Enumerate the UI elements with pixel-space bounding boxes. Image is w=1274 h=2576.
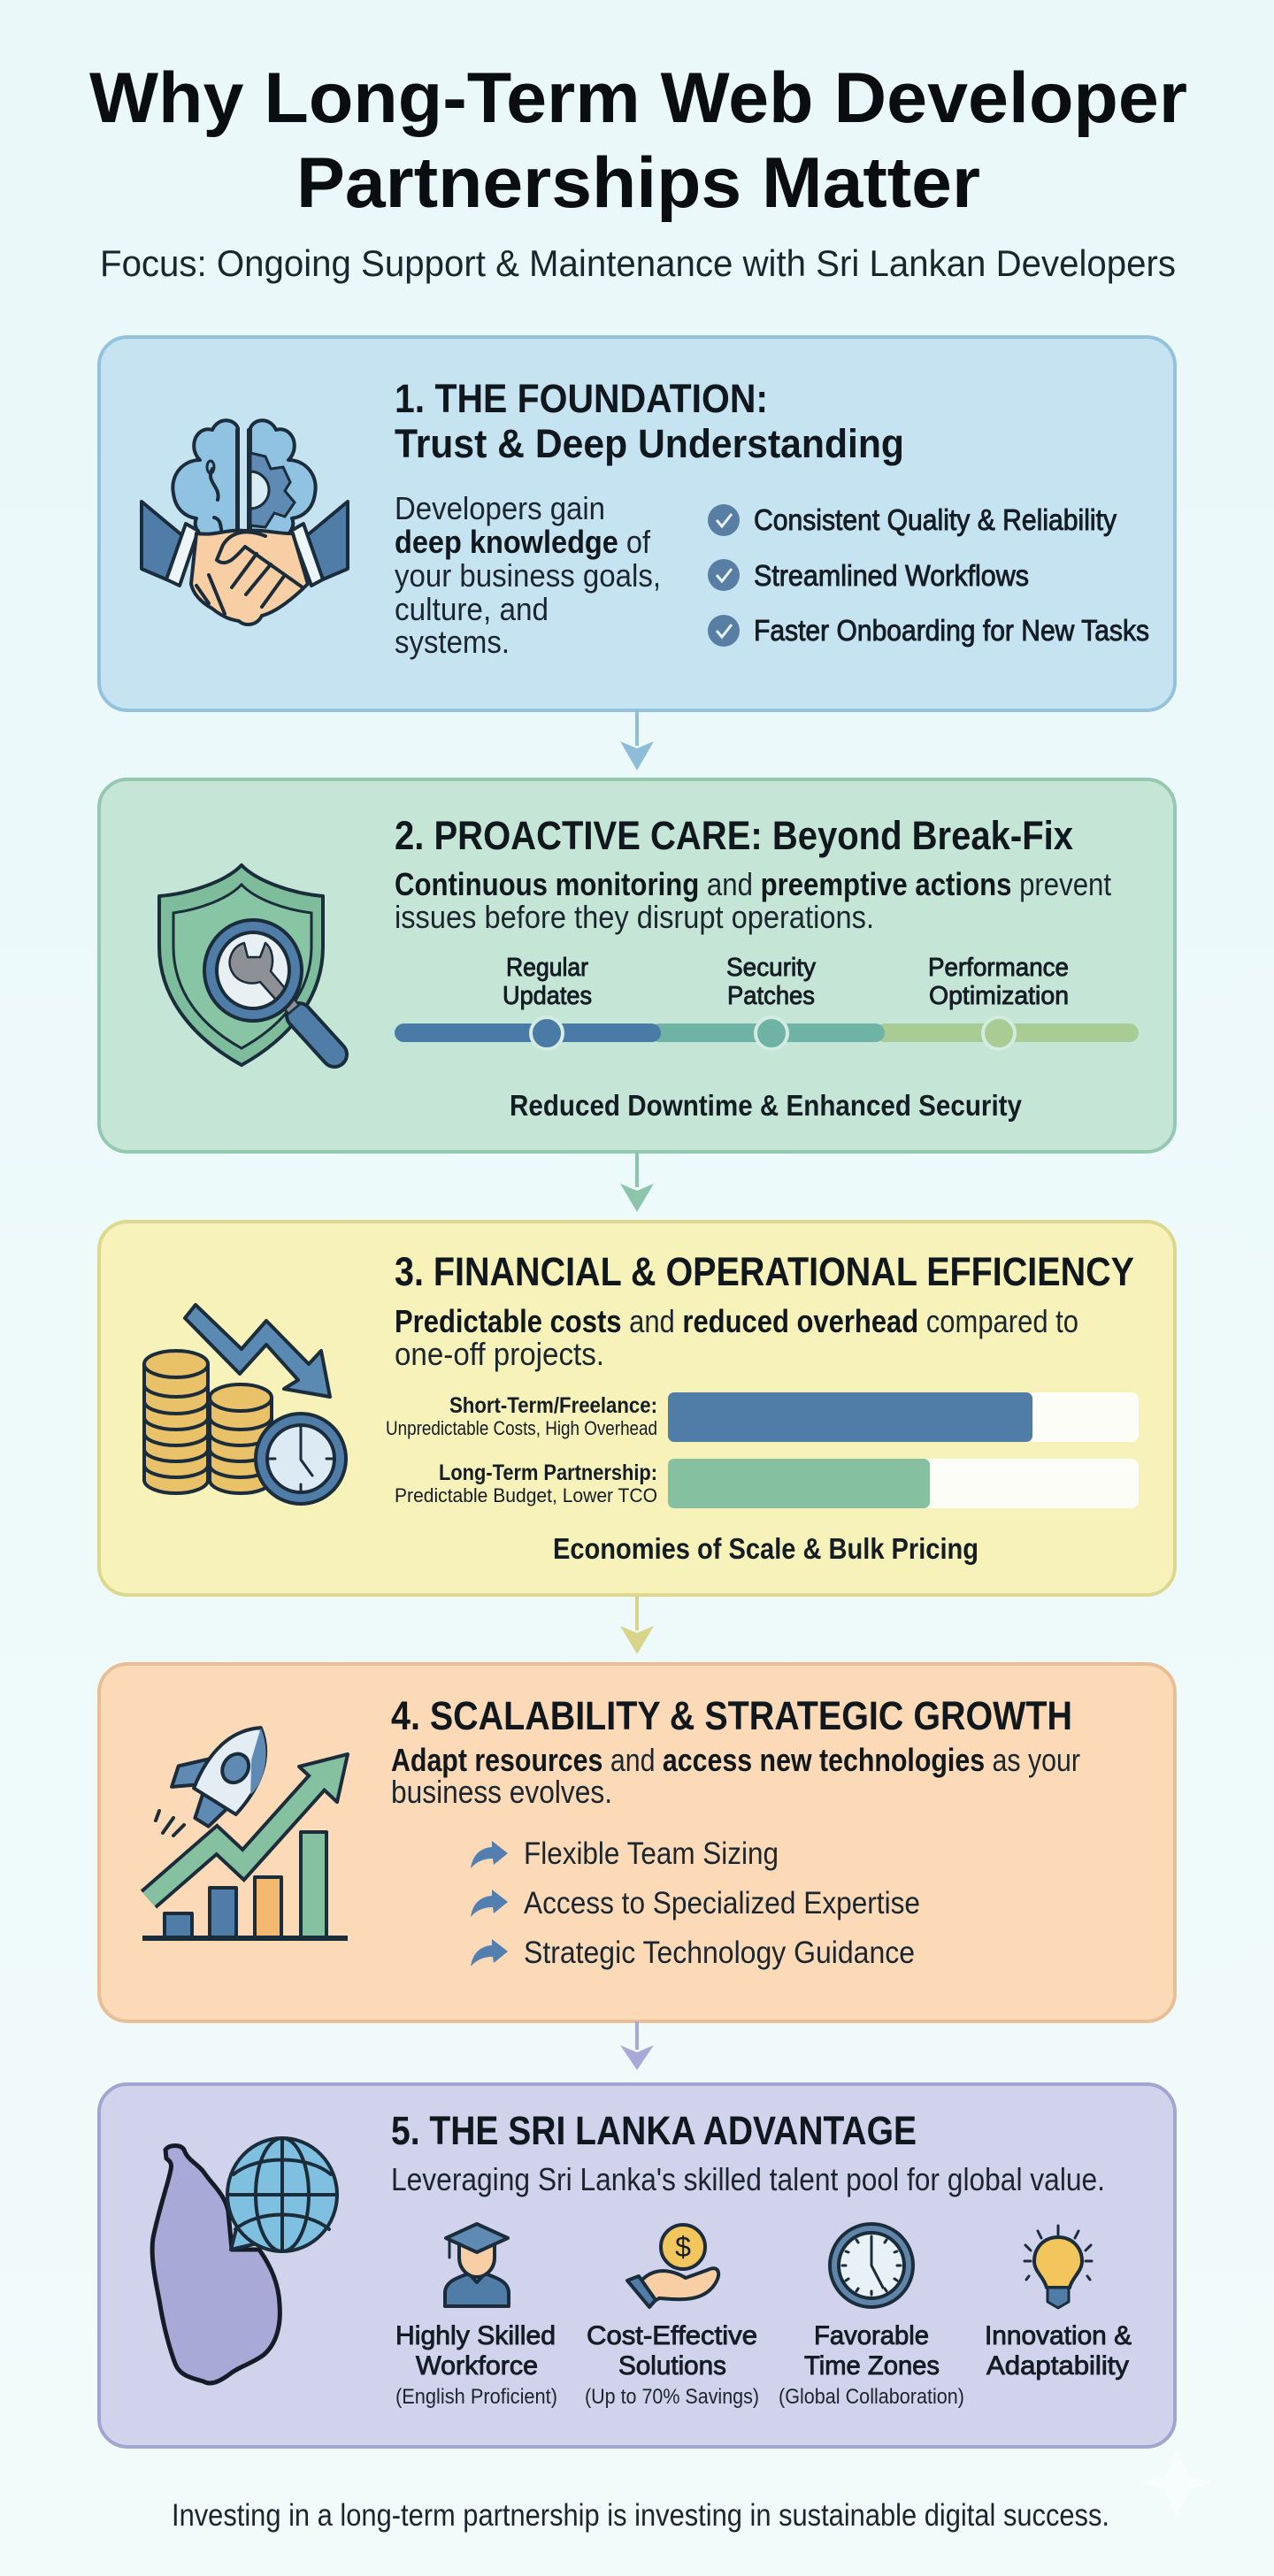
heading: Trust & Deep Understanding	[395, 421, 904, 466]
checklist	[708, 503, 1149, 647]
panel: financial efficiency	[99, 1222, 1175, 1595]
icon: hand with coin: $	[675, 2231, 691, 2263]
column: skilled workforce	[395, 2224, 557, 2409]
body text	[391, 1742, 1080, 1810]
body text: one-off projects.	[395, 1336, 604, 1372]
timeline labels	[503, 954, 1069, 1010]
panel: the foundation	[99, 337, 1175, 710]
body text: business evolves.	[391, 1774, 612, 1810]
timeline labels: Performance	[928, 954, 1069, 982]
panel: sri lanka advantage	[99, 2084, 1175, 2447]
bar chart: short-term vs long-term cost: Long-Term Partnership:	[439, 1460, 657, 1485]
heading: 4. SCALABILITY & STRATEGIC GROWTH	[391, 1693, 1072, 1738]
outcome: Reduced Downtime & Enhanced Security	[510, 1089, 1023, 1122]
icon: shield with magnifier and wrench	[159, 865, 334, 1065]
column: innovation	[985, 2226, 1132, 2380]
outcome: Economies of Scale & Bulk Pricing	[553, 1532, 979, 1565]
body text: culture, and	[395, 591, 549, 627]
panel: scalability	[99, 1664, 1175, 2021]
list with arrows: Access to Specialized Expertise	[524, 1886, 920, 1920]
bar chart: short-term vs long-term cost	[386, 1392, 1139, 1508]
checklist: Consistent Quality & Reliability	[754, 503, 1117, 536]
icon: brain and handshake	[142, 420, 348, 625]
icon: clock	[830, 2224, 913, 2307]
body text	[395, 1303, 1078, 1372]
timeline labels: Patches	[727, 982, 815, 1010]
arrow: panel 1 to 2	[620, 710, 654, 770]
bar chart: short-term vs long-term cost: Short-Term/Freelance:	[449, 1393, 657, 1418]
column: time zones: (Global Collaboration)	[779, 2385, 964, 2409]
body text: Leveraging Sri Lanka's skilled talent pool for global value.	[391, 2161, 1105, 2197]
body text: Developers gain	[395, 490, 605, 526]
title: Why Long-Term Web Developer	[89, 58, 1187, 138]
title: Partnerships Matter	[296, 143, 980, 223]
body text: systems.	[395, 624, 510, 660]
body text: Predictable costs and reduced overhead compared to	[395, 1303, 1078, 1339]
body text: your business goals,	[395, 557, 661, 594]
column: cost-effective: Solutions	[618, 2351, 726, 2380]
arrow: panel 2 to 3	[620, 1152, 654, 1212]
heading: 5. THE SRI LANKA ADVANTAGE	[391, 2108, 917, 2153]
footer statement: Investing in a long-term partnership is investing in sustainable digital success.	[172, 2498, 1109, 2533]
list with arrows	[471, 1836, 920, 1970]
checklist: Faster Onboarding for New Tasks	[754, 614, 1149, 647]
column: skilled workforce: Highly Skilled	[395, 2321, 556, 2350]
panel: proactive care	[99, 779, 1175, 1152]
list with arrows: Flexible Team Sizing	[524, 1836, 779, 1871]
column: innovation: Innovation &	[985, 2321, 1132, 2350]
timeline labels: Security	[726, 954, 816, 982]
heading: 2. PROACTIVE CARE: Beyond Break-Fix	[395, 813, 1073, 858]
body text: Continuous monitoring and preemptive actions prevent	[395, 866, 1111, 902]
list with arrows: Strategic Technology Guidance	[524, 1936, 915, 1970]
timeline labels: Updates	[503, 982, 592, 1010]
timeline track	[395, 1017, 1139, 1049]
body text	[395, 490, 661, 660]
column: time zones: Favorable	[814, 2321, 929, 2350]
body text: issues before they disrupt operations.	[395, 899, 874, 935]
column: time zones	[779, 2224, 964, 2409]
icon: rocket and growth chart	[142, 1701, 348, 1938]
column: cost-effective	[585, 2225, 759, 2409]
icon: graduate	[445, 2224, 509, 2306]
timeline labels: Optimization	[929, 982, 1069, 1010]
arrow: panel 4 to 5	[620, 2021, 654, 2070]
column: time zones: Time Zones	[804, 2351, 940, 2380]
arrow: panel 3 to 4	[620, 1595, 654, 1654]
icon: sri lanka map with globe	[152, 2138, 337, 2383]
column: cost-effective: Cost-Effective	[587, 2321, 757, 2350]
timeline labels: Regular	[506, 954, 588, 982]
checklist: Streamlined Workflows	[754, 559, 1029, 592]
icon: light bulb	[1025, 2226, 1092, 2308]
column: innovation: Adaptability	[986, 2351, 1129, 2380]
title	[89, 58, 1187, 223]
heading: 1. THE FOUNDATION:	[395, 376, 768, 421]
column: skilled workforce: Workforce	[416, 2351, 538, 2380]
body text	[395, 866, 1111, 935]
icon: coins, down arrow and clock	[144, 1305, 346, 1504]
bar chart: short-term vs long-term cost: Unpredictable Costs, High Overhead	[386, 1417, 657, 1439]
column: cost-effective: (Up to 70% Savings)	[585, 2385, 759, 2409]
heading	[395, 376, 904, 466]
heading: 3. FINANCIAL & OPERATIONAL EFFICIENCY	[395, 1249, 1134, 1294]
subtitle: Focus: Ongoing Support & Maintenance with Sri Lankan Developers	[100, 242, 1176, 284]
icon: hand with coin	[627, 2225, 718, 2307]
body text: Adapt resources and access new technologies as your	[391, 1742, 1080, 1778]
column: skilled workforce: (English Proficient)	[395, 2385, 557, 2409]
body text: deep knowledge of	[395, 524, 651, 560]
bar chart: short-term vs long-term cost: Predictable Budget, Lower TCO	[395, 1484, 657, 1506]
